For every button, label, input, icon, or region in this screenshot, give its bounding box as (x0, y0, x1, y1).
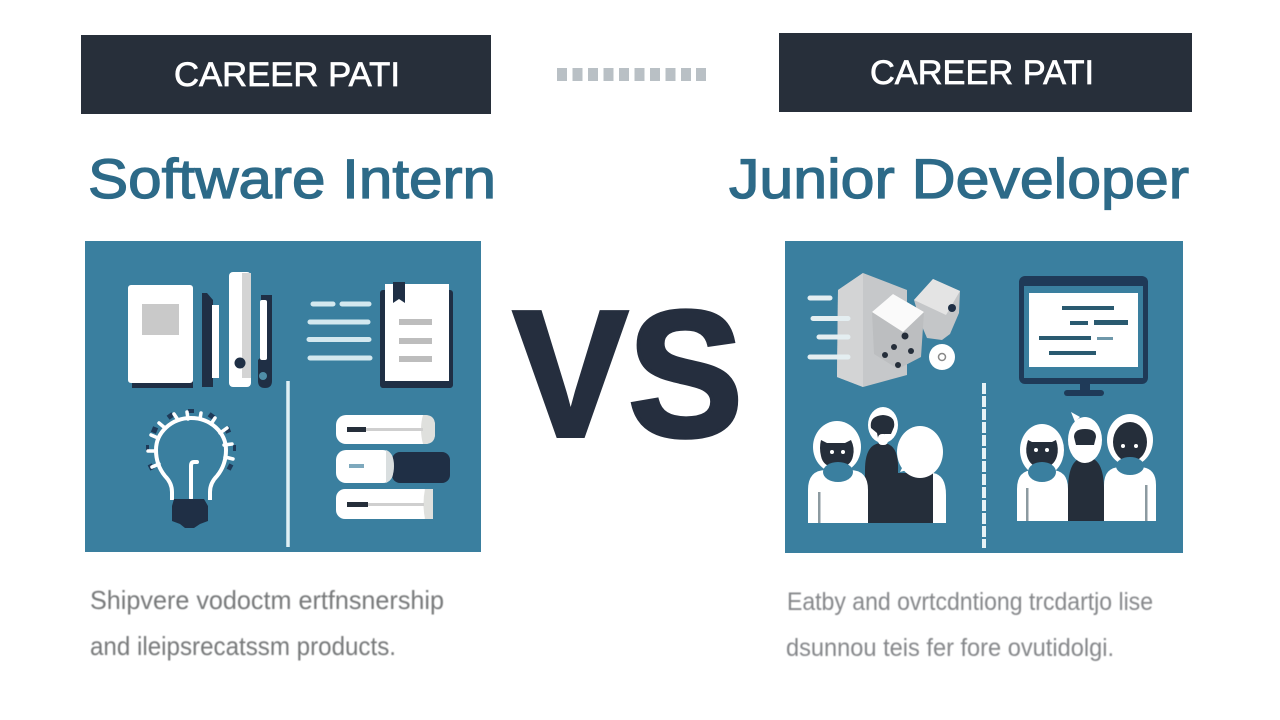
icon: book (128, 285, 193, 388)
icon: motion lines (810, 298, 848, 357)
icon: server cube and dice (837, 273, 960, 387)
panel divider: left (286, 381, 290, 547)
header bar: right career path: CAREER PATI (870, 54, 1094, 92)
heading: Software Intern: Software Intern (88, 147, 496, 210)
icon: right team of people (1017, 412, 1156, 521)
icon: left team of people (808, 407, 946, 523)
panel: junior developer illustrations (785, 241, 1183, 553)
icon: notebook with bookmark (380, 282, 453, 388)
icon: thin binder (202, 293, 219, 387)
icon: computer monitor with code (1019, 276, 1148, 396)
icon: tall binder (229, 272, 251, 387)
description: junior developer: Eatby and ovrtcdntiong trcdartjo lise (787, 588, 1153, 616)
description: software intern (90, 585, 444, 661)
panel: software intern illustrations (85, 241, 481, 552)
dotted connector between headers (557, 68, 706, 81)
heading: Junior Developer: Junior Developer (729, 147, 1189, 210)
header bar: left career path: CAREER PATI (174, 56, 400, 94)
icon: narrow binder (258, 295, 272, 388)
icon: light bulb (146, 409, 236, 528)
description: junior developer: dsunnou teis fer fore ovutidolgi. (786, 634, 1114, 662)
header bar: left career path (81, 35, 491, 114)
icon: text lines (309, 304, 370, 358)
description: software intern: and ileipsrecatssm products. (90, 631, 396, 661)
icon: stack of rolled documents (336, 415, 450, 519)
description: software intern: Shipvere vodoctm ertfnsnership (90, 585, 444, 615)
VS label: VS (513, 274, 743, 475)
description: junior developer (786, 588, 1153, 662)
panel divider: right (982, 383, 986, 548)
header bar: right career path (779, 33, 1192, 112)
